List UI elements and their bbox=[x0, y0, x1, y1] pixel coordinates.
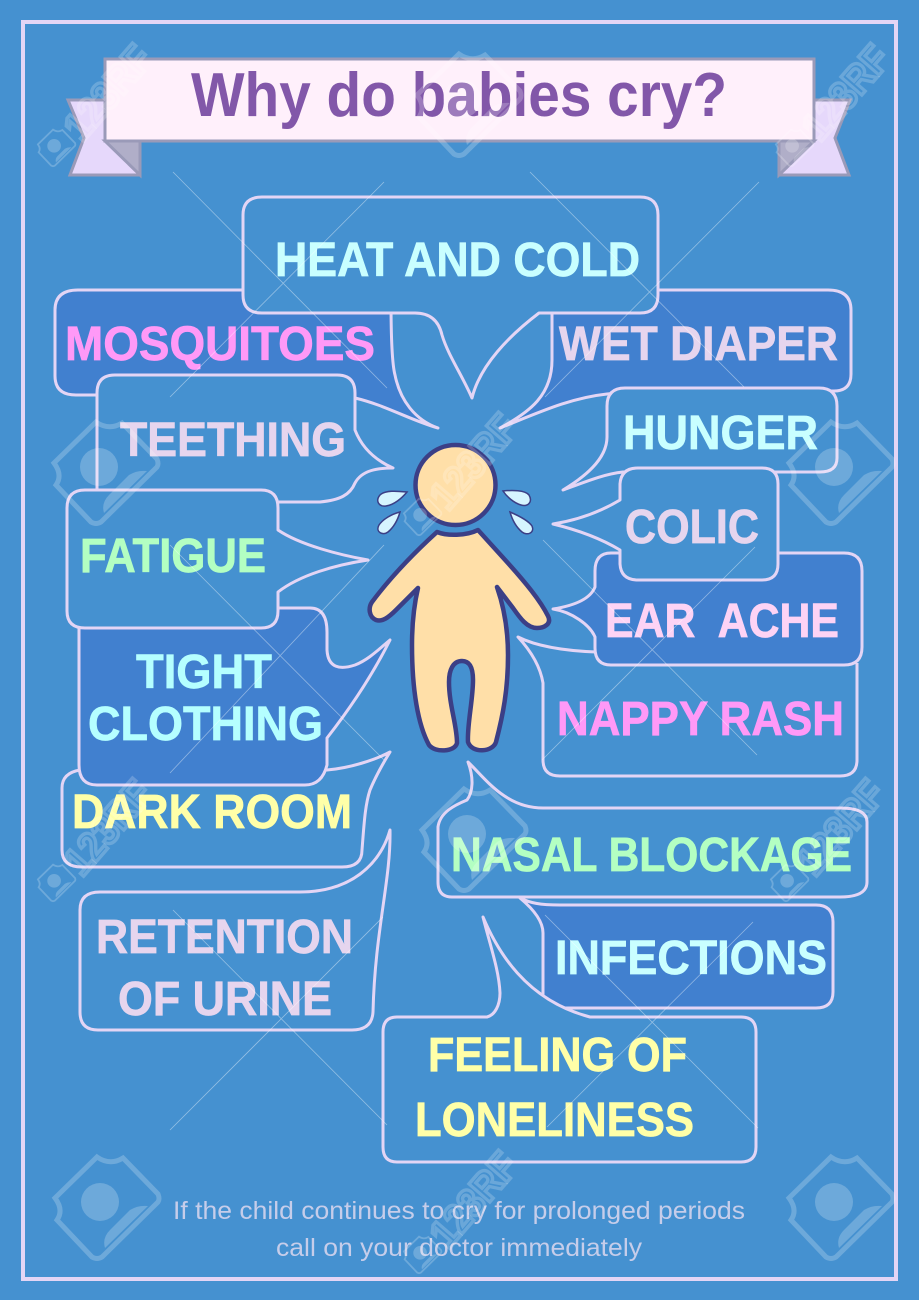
bubble: feeling of loneliness bbox=[383, 917, 756, 1162]
label: nappy rash: NAPPY RASH bbox=[557, 693, 844, 746]
title banner bbox=[68, 59, 850, 175]
bubble: hunger bbox=[563, 388, 837, 490]
tear: lower right bbox=[510, 512, 533, 534]
label: loneliness: LONELINESS bbox=[415, 1094, 694, 1147]
label: teething: TEETHING bbox=[120, 414, 346, 467]
bubble: fatigue bbox=[67, 490, 368, 628]
label: mosquitoes: MOSQUITOES bbox=[65, 318, 375, 371]
bubble: dark room bbox=[62, 752, 390, 867]
bubble: infections bbox=[520, 898, 833, 1008]
stock watermarks: 123RF bbox=[422, 406, 527, 518]
bubble: nasal blockage bbox=[438, 762, 867, 897]
label: of urine: OF URINE bbox=[118, 973, 332, 1026]
stock watermarks: 123RF bbox=[422, 1144, 527, 1256]
bubble: colic bbox=[553, 468, 778, 580]
label: feeling of: FEELING OF bbox=[428, 1029, 687, 1082]
bubble: heat and cold bbox=[243, 197, 658, 398]
bubble: nappy rash bbox=[518, 637, 857, 776]
bubble: retention of urine bbox=[80, 830, 390, 1030]
footer line 1: If the child continues to cry for prolonged periods bbox=[173, 1197, 745, 1225]
stock watermarks: 123RF bbox=[794, 37, 899, 149]
label: wet diaper: WET DIAPER bbox=[559, 318, 838, 371]
footer line 2: call on your doctor immediately bbox=[276, 1234, 643, 1262]
title: Why do babies cry? bbox=[191, 61, 727, 130]
bubble: tight clothing bbox=[79, 608, 390, 785]
label: heat and cold: HEAT AND COLD bbox=[275, 234, 640, 287]
label: hunger: HUNGER bbox=[623, 407, 818, 460]
stock watermarks: 123RF bbox=[789, 772, 894, 884]
stock watermarks: 123RF bbox=[56, 37, 161, 149]
label: dark room: DARK ROOM bbox=[72, 786, 352, 839]
bubble: wet diaper bbox=[500, 290, 851, 428]
baby body bbox=[370, 530, 549, 750]
label: colic: COLIC bbox=[625, 501, 759, 554]
stock watermarks: 123RF bbox=[56, 772, 161, 884]
label: tight: TIGHT bbox=[136, 646, 272, 699]
label: nasal blockage: NASAL BLOCKAGE bbox=[451, 829, 852, 882]
label: clothing: CLOTHING bbox=[88, 698, 323, 751]
tear: upper left bbox=[378, 491, 407, 506]
bubble: mosquitoes bbox=[55, 290, 438, 428]
bubble: teething bbox=[97, 375, 393, 502]
icon: crying baby bbox=[370, 445, 549, 750]
bubble: ear ache bbox=[553, 553, 862, 665]
label: retention: RETENTION bbox=[96, 911, 353, 964]
label: fatigue: FATIGUE bbox=[80, 530, 266, 583]
tear: lower left bbox=[378, 512, 400, 534]
label: ear ache: EAR ACHE bbox=[605, 595, 839, 648]
tear: upper right bbox=[503, 490, 530, 505]
footer note bbox=[173, 1197, 745, 1262]
baby head bbox=[416, 445, 496, 525]
label: infections: INFECTIONS bbox=[555, 932, 827, 985]
